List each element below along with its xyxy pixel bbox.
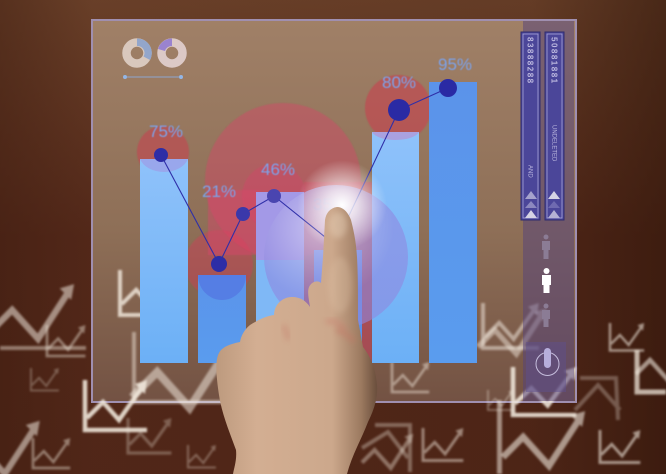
percentage labels: 75% bbox=[149, 122, 183, 141]
vertical menu strips: UNDELETED bbox=[550, 125, 556, 162]
power button bbox=[526, 342, 566, 392]
side control column bbox=[521, 21, 574, 401]
percentage labels: 80% bbox=[382, 73, 416, 92]
hand with pointing finger bbox=[216, 207, 377, 474]
bar chart bbox=[140, 82, 477, 363]
background trend chart icons bbox=[0, 270, 666, 474]
vertical menu strips bbox=[521, 32, 564, 220]
person icons bbox=[542, 234, 551, 327]
circle overlays on bars bbox=[140, 132, 419, 329]
percentage labels: 46% bbox=[261, 160, 295, 179]
percentage labels: 35% bbox=[313, 195, 347, 214]
percentage labels: 21% bbox=[202, 182, 236, 201]
percentage labels: 95% bbox=[438, 55, 472, 74]
vertical menu strips: 50881881 bbox=[550, 37, 558, 85]
vertical menu strips: AND bbox=[526, 165, 532, 178]
donut charts and slider bbox=[123, 38, 183, 79]
glass panel bbox=[92, 20, 576, 402]
touch glow bbox=[297, 160, 387, 250]
red highlight circles bbox=[137, 75, 431, 362]
line chart bbox=[154, 79, 457, 272]
percentage labels bbox=[149, 55, 472, 214]
vertical menu strips: 83888288 bbox=[526, 37, 534, 85]
